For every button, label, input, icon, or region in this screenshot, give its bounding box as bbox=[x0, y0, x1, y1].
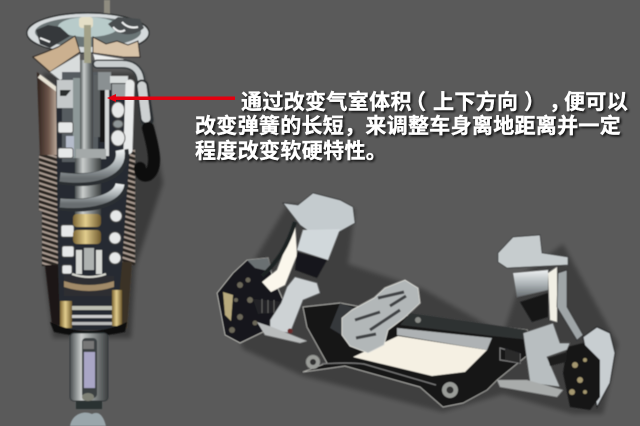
axle: right brake disc bbox=[563, 327, 615, 410]
axle: steering gear bbox=[342, 280, 420, 353]
axle: left brake disc bbox=[217, 258, 285, 343]
callout text: 上下方向 bbox=[433, 90, 518, 114]
callout text: 改变弹簧的长短，来调整车身离地距离并一定 bbox=[195, 114, 621, 138]
axle: left air spring bbox=[257, 193, 355, 343]
axle: subframe bbox=[303, 303, 540, 407]
strut: piston rod bbox=[70, 333, 108, 426]
strut: dark interior bbox=[56, 82, 130, 330]
callout line: red arrow bbox=[107, 94, 235, 102]
strut: air hose bbox=[97, 64, 154, 176]
callout text: ， bbox=[549, 91, 570, 114]
strut: top mount bbox=[27, 0, 149, 80]
callout text: 便可以 bbox=[564, 91, 628, 114]
callout text: ） bbox=[524, 91, 545, 114]
strut: damper valve stack bbox=[50, 274, 127, 336]
illustration: air suspension axle bbox=[217, 193, 618, 414]
axle: steering gear detail bbox=[355, 292, 406, 338]
strut: gold bump stop bbox=[73, 214, 102, 274]
strut: main spring loops bbox=[60, 150, 122, 205]
illustration: air strut cutaway bbox=[27, 0, 163, 426]
axle: right knuckle and drive shaft bbox=[497, 323, 570, 397]
strut: inner air chamber and rod bbox=[57, 25, 128, 224]
strut: outer housing and spring coils bbox=[37, 72, 135, 328]
callout text bbox=[195, 90, 628, 163]
strut: coil rollers bbox=[58, 102, 125, 274]
callout text: 程度改变软硬特性。 bbox=[195, 139, 387, 163]
axle: right air spring bbox=[498, 235, 583, 340]
callout text: 通过改变气室体积 bbox=[241, 90, 412, 114]
callout text: （ bbox=[405, 91, 426, 114]
